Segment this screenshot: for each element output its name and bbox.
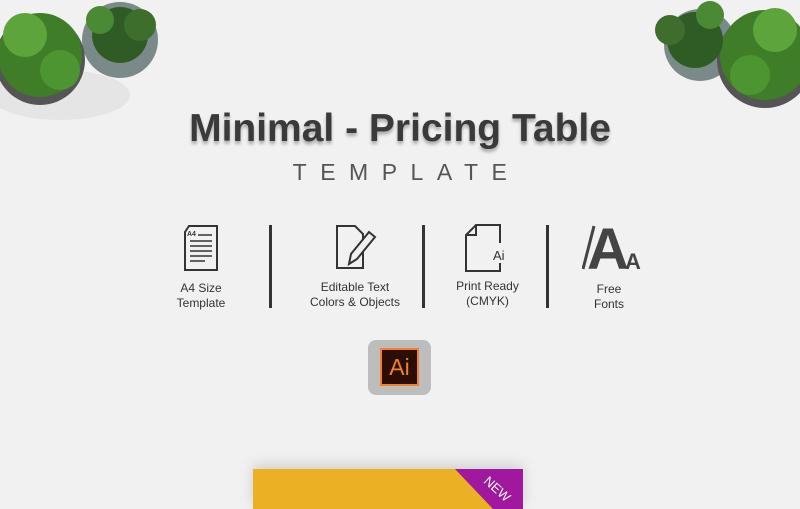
plant: top right	[655, 1, 800, 108]
ribbon: new: NEW	[481, 473, 514, 505]
label: A4: A4 Size	[180, 281, 222, 295]
icon: A4 document: A4	[187, 231, 196, 238]
icon: A4 document	[184, 225, 218, 271]
icon: print ready	[465, 224, 505, 272]
label: fonts: Fonts	[594, 297, 624, 311]
icon: illustrator	[368, 340, 431, 395]
title: Minimal - Pricing Table	[189, 107, 611, 150]
label: A4: Template	[177, 296, 225, 310]
label: fonts: Free	[597, 282, 621, 296]
label: editable: Editable Text	[321, 280, 389, 294]
label: print ready	[456, 279, 519, 308]
icon: illustrator: Ai	[389, 354, 410, 380]
preview card	[253, 469, 523, 509]
icon: edit	[336, 225, 376, 269]
plant: top left	[0, 2, 158, 120]
subtitle: TEMPLATE	[293, 159, 520, 185]
ribbon: new	[455, 469, 523, 509]
label: print ready: (CMYK)	[466, 294, 509, 308]
icon: print ready: Ai	[493, 248, 505, 263]
label: editable: Colors & Objects	[310, 295, 400, 309]
label: print ready: Print Ready	[456, 279, 519, 293]
label: fonts	[594, 282, 624, 311]
label: A4	[176, 281, 225, 310]
label: editable	[310, 280, 400, 309]
